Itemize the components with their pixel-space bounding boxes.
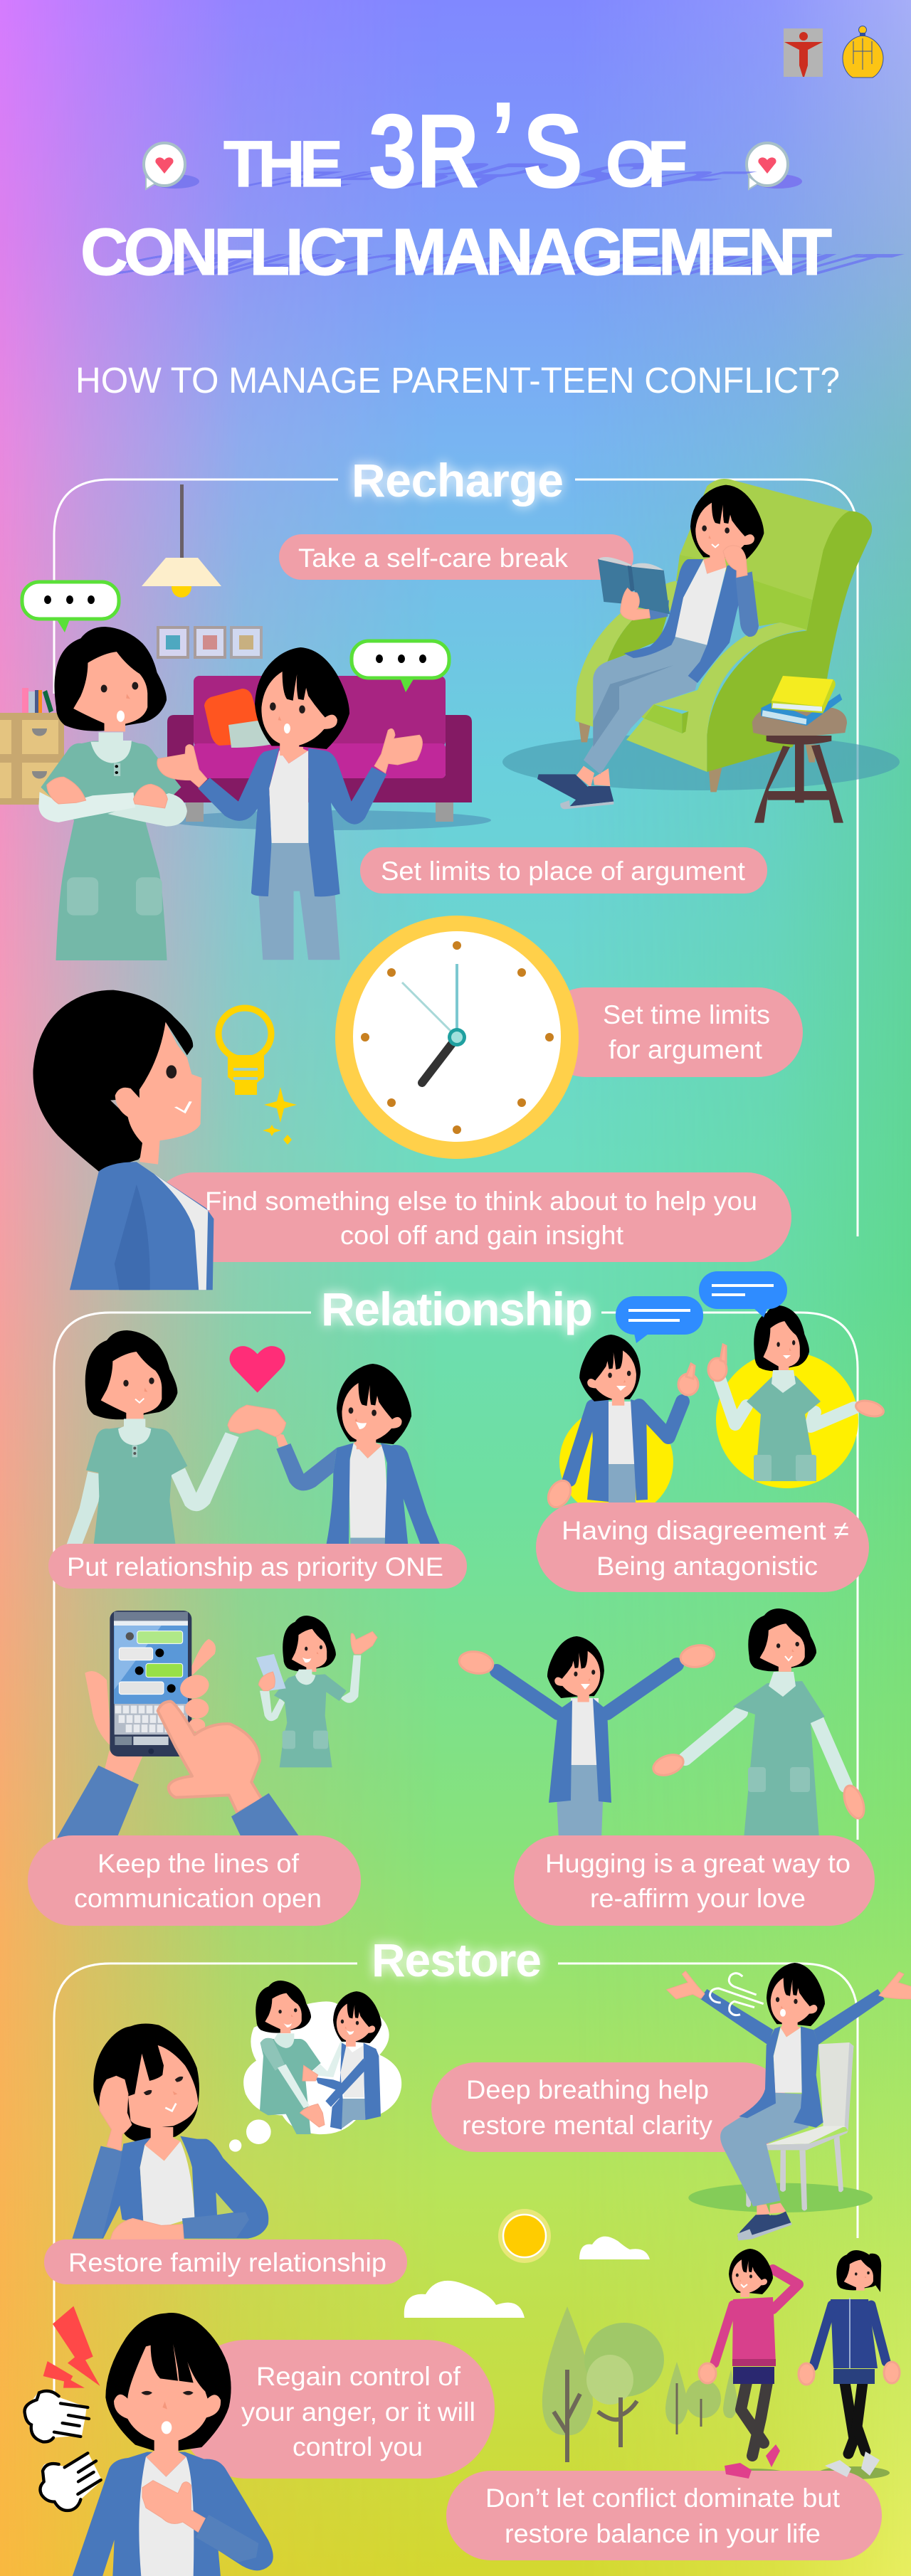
pill: find something else: [149, 1172, 791, 1262]
title shadow: [57, 156, 911, 281]
girl thinking with hand on cheek: [73, 2024, 268, 2240]
logo: yellow praying hands: [843, 26, 883, 78]
pill: don't let conflict dominate: restore balance in your life: [505, 2519, 821, 2548]
title: heart bubble left: [144, 143, 199, 189]
blue speech bubble: lower: [616, 1296, 703, 1343]
pill: put relationship as priority one: [48, 1544, 467, 1589]
floor shadow: armchair: [502, 733, 900, 790]
pill: hugging: [514, 1835, 875, 1926]
pill: take a self-care break: [279, 534, 633, 580]
woman in pink jacket: [699, 2249, 799, 2479]
title: [80, 81, 832, 289]
yellow circle: right: [716, 1352, 858, 1488]
pill: restore family relationship: Restore family relationship: [68, 2248, 386, 2277]
heading: restore: Restore: [372, 1934, 542, 1986]
lamp: [142, 484, 221, 598]
angry girl with hand on chest: [73, 2313, 273, 2576]
pill: set limits to place of argument: Set limits to place of argument: [381, 857, 746, 886]
thought bubble: [229, 1981, 401, 2152]
yellow circle: left: [559, 1406, 673, 1517]
panel: restore: [25, 1934, 911, 2576]
woman in profile: [33, 990, 214, 1290]
pill: hugging: Hugging is a great way to: [545, 1849, 851, 1878]
girl breathing on chair: [667, 1963, 911, 2240]
anger icons: bolts and steam: [25, 2306, 102, 2511]
title: CONFLICT MANAGEMENT: [80, 215, 832, 289]
panel: relationship: [28, 1271, 885, 1926]
bookshelf: [0, 688, 64, 805]
icon: steam puff lower: [40, 2452, 102, 2511]
title: heart bubble right: [747, 143, 802, 189]
pill: keep the lines of communication open: communication open: [74, 1884, 322, 1913]
daughter gesturing: [157, 647, 422, 960]
clasped hands: [228, 1405, 286, 1436]
picture frames: [158, 627, 261, 657]
daughter pointing: [544, 1335, 698, 1511]
speech bubble: right: [352, 641, 449, 692]
pill: regain control: [178, 2340, 495, 2479]
panel: recharge: [0, 454, 900, 1290]
armchair: [575, 479, 872, 792]
pill: deep breathing: restore mental clarity: [462, 2111, 713, 2140]
pill: regain control: your anger, or it will: [241, 2397, 475, 2427]
icon: red anger bolts: [43, 2306, 100, 2388]
title: 3R: [369, 93, 479, 210]
title shadow: OF: [583, 167, 781, 191]
pill: hugging: re-affirm your love: [590, 1884, 806, 1913]
mother open arms: [651, 1608, 868, 1839]
pill: don't let conflict dominate: Don’t let conflict dominate but: [485, 2484, 841, 2513]
subtitle: HOW TO MANAGE PARENT-TEEN CONFLICT?: [75, 360, 840, 401]
pill: find something else: Find something else to think about to help you: [205, 1187, 757, 1216]
pill: having disagreement: [536, 1502, 869, 1592]
icon: sparkles: [263, 1087, 297, 1145]
heading: recharge: Recharge: [352, 454, 564, 507]
title: ’: [491, 81, 515, 198]
icon: sun: [498, 2209, 551, 2263]
phone in hands: [57, 1611, 300, 1838]
pill: find something else: cool off and gain insight: [340, 1221, 624, 1250]
pill: take a self-care break: Take a self-care break: [298, 544, 569, 573]
title: S: [523, 93, 583, 210]
clock: [335, 916, 579, 1159]
pill: deep breathing: [431, 2062, 787, 2152]
pill: keep the lines of communication open: Keep the lines of: [98, 1849, 300, 1878]
daughter holding hands: [275, 1364, 440, 1545]
walking shadows: [717, 2466, 890, 2483]
round stool with books: [752, 676, 847, 823]
daughter open arms: [458, 1636, 716, 1839]
trees: [542, 2306, 738, 2462]
icon: steam puff upper: [25, 2391, 89, 2442]
pill: having disagreement: Having disagreement ≠: [562, 1516, 849, 1545]
title shadow: THE: [201, 167, 437, 191]
icon: small cloud: [579, 2237, 650, 2259]
pill: don't let conflict dominate: [446, 2471, 882, 2560]
title shadow: CONFLICT MANAGEMENT: [57, 248, 911, 281]
pill: restore family relationship: [44, 2240, 407, 2284]
pill: keep the lines of communication open: [28, 1835, 361, 1926]
icon: pink heart: [229, 1346, 285, 1393]
icon: large cloud: [404, 2281, 525, 2318]
pill: regain control: control you: [293, 2432, 423, 2461]
mother with phone: [256, 1616, 377, 1767]
mother pointing: [708, 1305, 885, 1481]
speech bubble: left: [22, 582, 119, 632]
woman reading in armchair: [537, 485, 764, 809]
icon: light bulb: [218, 1008, 271, 1095]
pill: set time limits for argument: [541, 987, 803, 1077]
pill: regain control: Regain control of: [256, 2362, 461, 2391]
title shadow: S: [496, 156, 695, 195]
logo: grey and red figure: [784, 28, 823, 77]
title shadow: 3R: [342, 156, 591, 195]
pill: set time limits for argument: Set time limits: [603, 1000, 770, 1029]
heading: relationship: Relationship: [321, 1283, 593, 1335]
pill: deep breathing: Deep breathing help: [466, 2075, 709, 2104]
mother holding hands: [66, 1330, 239, 1545]
pill: having disagreement: Being antagonistic: [596, 1552, 818, 1581]
blue speech bubble: upper: [699, 1271, 787, 1318]
pill: put relationship as priority one: Put relationship as priority ONE: [67, 1552, 443, 1581]
sofa: [167, 676, 491, 830]
pill: set limits to place of argument: [360, 847, 767, 894]
pill: set time limits for argument: for argument: [609, 1035, 763, 1064]
title: THE: [223, 128, 343, 201]
woman in blue jacket: [799, 2250, 900, 2477]
title: OF: [606, 128, 688, 201]
mother with crossed arms: [38, 627, 187, 960]
